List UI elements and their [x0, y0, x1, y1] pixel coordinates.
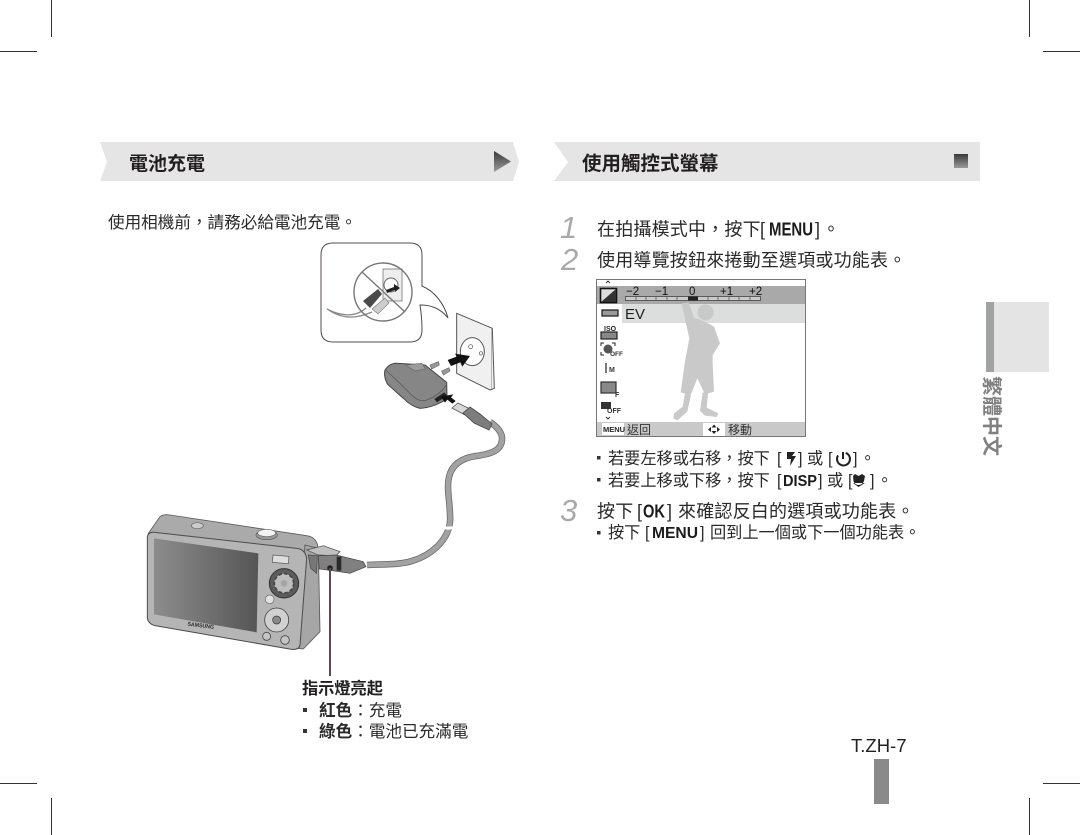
page number: T.ZH-7	[851, 735, 906, 756]
page tab	[874, 759, 889, 804]
bullet: left right	[597, 450, 876, 468]
illustration: charger cable	[367, 403, 502, 565]
icon: macro	[853, 474, 865, 487]
panel: battery charging heading banner	[100, 142, 519, 181]
step 3: [	[637, 502, 642, 522]
leader line to indicator light	[327, 565, 333, 676]
illustration: wall socket	[457, 313, 494, 390]
camera screen	[154, 538, 258, 632]
bullet: menu return: [	[645, 524, 650, 542]
shutter button	[256, 529, 277, 540]
step 2: 2	[560, 242, 578, 277]
camera side	[297, 545, 320, 649]
move label: 移動	[728, 423, 752, 437]
navigation pad	[265, 608, 289, 632]
legend item: green: 綠色：電池已充滿電	[319, 721, 468, 741]
EV scale	[626, 286, 762, 300]
step 1	[560, 210, 840, 245]
side language label: 繁體中文	[980, 376, 1004, 456]
icon: prohibition sign	[354, 263, 412, 321]
bullet: left right: 若要左移或右移，按下	[608, 450, 770, 468]
illustration: camera	[147, 515, 366, 649]
USB connector	[307, 546, 366, 573]
EV band	[622, 304, 805, 323]
bullet: left right: [	[777, 450, 782, 468]
menu icons: ISO	[604, 326, 617, 333]
step 1: [	[760, 220, 765, 240]
brand label: SAMSUNG	[187, 622, 215, 631]
icon: arrow into socket	[448, 354, 470, 367]
bullet: up down: [	[848, 472, 853, 490]
icon: mini plugs	[363, 289, 389, 314]
bullet: left right: [	[828, 450, 833, 468]
legend: indicator light: 指示燈亮起	[302, 679, 383, 698]
step 1: 。	[822, 220, 840, 240]
EV scale: −2	[626, 286, 639, 298]
bullet: up down: ]	[870, 472, 874, 490]
mode dial	[269, 569, 299, 598]
step 3: 按下	[597, 502, 633, 522]
camera front face	[147, 532, 307, 649]
nav key	[703, 423, 725, 436]
step 2	[560, 242, 906, 277]
panel: touch screen heading banner	[554, 142, 980, 181]
bullet: menu return	[597, 524, 920, 542]
menu icons: M	[609, 367, 615, 374]
bullet: menu return: ]	[700, 524, 704, 542]
icon: flash	[787, 452, 796, 466]
illustration: callout do not unplug	[321, 243, 448, 342]
bullet: up down	[597, 472, 893, 490]
step 3: 3	[560, 493, 577, 528]
silhouette person	[673, 302, 720, 420]
icon: cable break mark	[444, 527, 461, 530]
EV scale: +1	[720, 286, 733, 298]
step 3: OK	[643, 502, 665, 522]
bullet: left right: 或	[807, 450, 823, 468]
icon: continue arrow	[494, 151, 511, 172]
display switch	[272, 555, 289, 564]
menu icons: OFF	[607, 408, 622, 415]
bullet: menu return: 回到上一個或下一個功能表。	[710, 524, 920, 542]
illustration: charger adapter	[385, 362, 450, 408]
bullet: up down: ]	[818, 472, 822, 490]
camera body top	[148, 515, 318, 565]
EV scale: 0	[689, 286, 695, 298]
back label: 返回	[627, 423, 651, 437]
bullet: up down: 若要上移或下移，按下	[608, 472, 770, 490]
top selected bar	[597, 286, 805, 304]
step 3: 來確認反白的選項或功能表。	[678, 502, 915, 522]
heading: battery charging: 電池充電	[129, 153, 205, 175]
power button	[191, 523, 203, 529]
EV scale: +2	[749, 286, 762, 298]
small buttons	[263, 632, 289, 644]
step 1: ]	[815, 220, 820, 240]
step 2: 使用導覽按鈕來捲動至選項或功能表。	[597, 250, 906, 270]
legend: indicator light	[302, 679, 468, 741]
menu icons: F	[615, 392, 620, 399]
legend item: red: 紅色：充電	[319, 700, 402, 720]
icon: cable	[327, 308, 372, 317]
bullet: menu return: 按下	[608, 524, 640, 542]
step 3	[560, 493, 915, 528]
icon: USB plug end	[452, 403, 492, 430]
bullet: left right: ]	[853, 450, 858, 468]
menu button	[265, 595, 274, 604]
step 1: 1	[560, 210, 577, 245]
step 3: ]	[667, 502, 672, 522]
text: charge instruction: 使用相機前，請務必給電池充電。	[108, 213, 357, 232]
bullet: up down: DISP	[783, 473, 817, 490]
icon: timer	[835, 451, 852, 467]
EV label: EV	[625, 306, 645, 323]
screen mockup	[596, 280, 806, 437]
icon: arrow into charger	[441, 394, 456, 404]
step 1: MENU	[769, 220, 813, 240]
bullet: left right: ]	[798, 450, 802, 468]
step 1: 在拍攝模式中，按下	[597, 220, 761, 240]
side tab	[986, 302, 1049, 372]
bullet: up down: 或	[827, 472, 843, 490]
bullet: up down: 。	[876, 472, 893, 490]
heading: touch screen: 使用觸控式螢幕	[582, 152, 719, 175]
icon: mini wall socket	[383, 269, 402, 301]
menu icons	[600, 281, 623, 419]
bullet: menu return: MENU	[652, 525, 698, 542]
menu key: MENU	[603, 425, 625, 434]
menu icons: OFF	[610, 351, 623, 358]
bullet: up down: [	[777, 472, 782, 490]
bottom bar	[597, 422, 805, 436]
icon: end square	[954, 154, 968, 168]
EV scale: −1	[655, 286, 668, 298]
bullet: left right: 。	[860, 450, 876, 468]
